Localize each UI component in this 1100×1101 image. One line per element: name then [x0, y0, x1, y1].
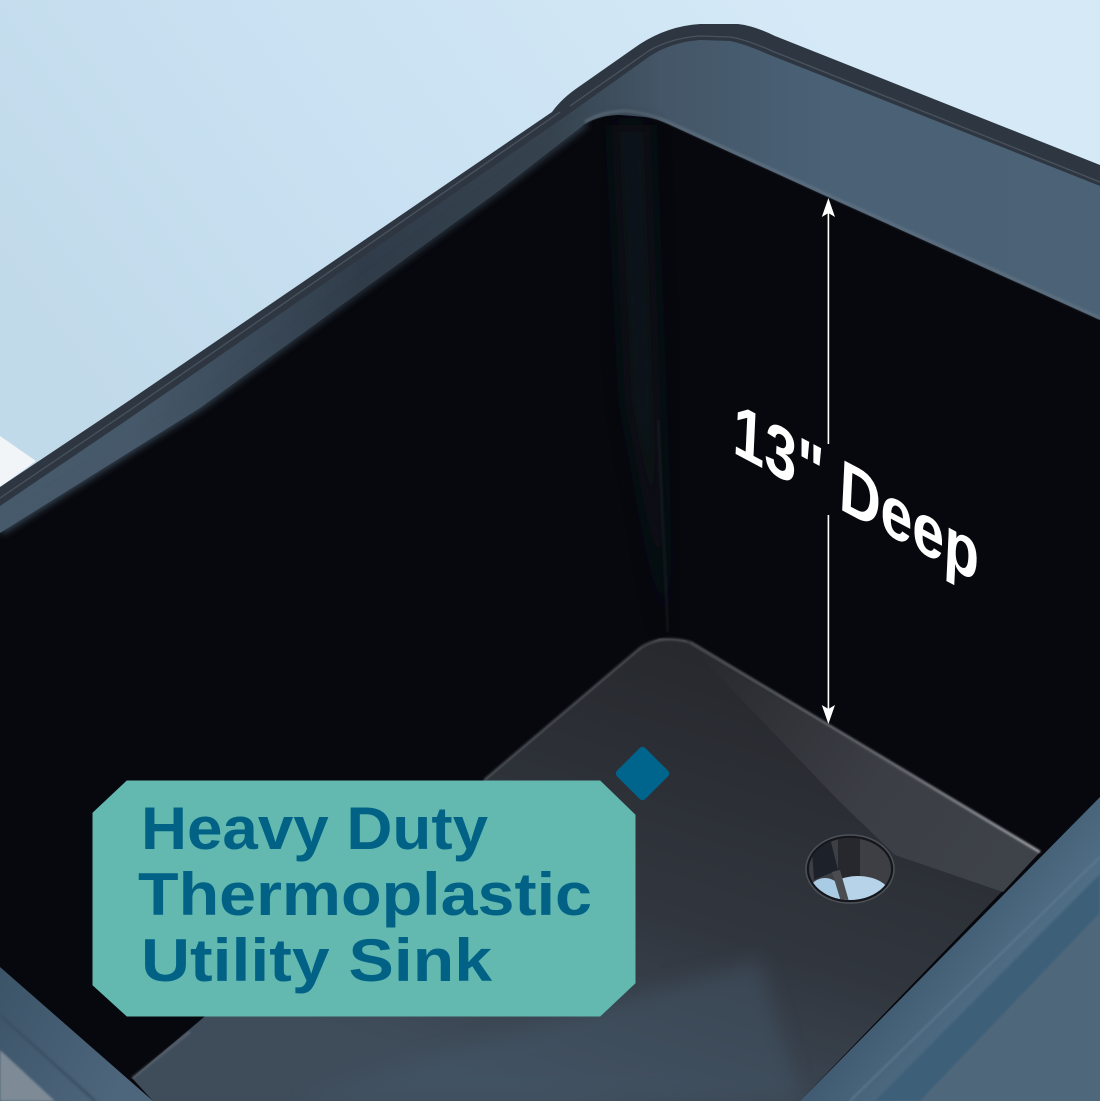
floor right edge highlight: [690, 642, 1040, 852]
depth label: 13" Deep: [731, 387, 981, 598]
title line 2: Thermoplastic: [138, 861, 592, 928]
arrow upper shaft: [828, 206, 829, 444]
badge shape: [93, 781, 635, 1016]
front left rim fold: [0, 1015, 95, 1101]
title badge: [93, 781, 635, 1016]
drain inner: [809, 838, 891, 900]
front right rim: [800, 797, 1100, 1101]
front right rim fold: [850, 857, 1100, 1101]
title line 3: Utility Sink: [141, 927, 493, 994]
front left rim: [0, 967, 153, 1101]
arrow top head: [822, 198, 835, 217]
rim left soft shade: [0, 122, 585, 530]
front left outer face: [0, 1050, 55, 1101]
seam highlight: [658, 420, 668, 632]
rim molding line: [0, 36, 1100, 498]
floor left edge highlight: [132, 639, 690, 1078]
arrow bottom head: [822, 705, 835, 724]
rim inner highlight: [585, 111, 1100, 318]
front right rim shadow: [875, 874, 1100, 1101]
wall corner seam: [612, 125, 668, 640]
rim top face: [0, 40, 1100, 560]
front right outer face: [920, 913, 1100, 1101]
badge text: [138, 795, 592, 994]
arrow lower shaft: [828, 515, 829, 715]
icon: diamond: [614, 745, 671, 802]
sloped floor band: [692, 648, 1040, 892]
sink floor: [132, 638, 1040, 1101]
depth arrow: [822, 198, 835, 724]
drain rim: [806, 835, 894, 903]
title line 1: Heavy Duty: [141, 795, 489, 862]
drain: [805, 834, 895, 904]
floor lower sheen: [300, 960, 800, 1101]
white counter strip: [0, 436, 36, 487]
